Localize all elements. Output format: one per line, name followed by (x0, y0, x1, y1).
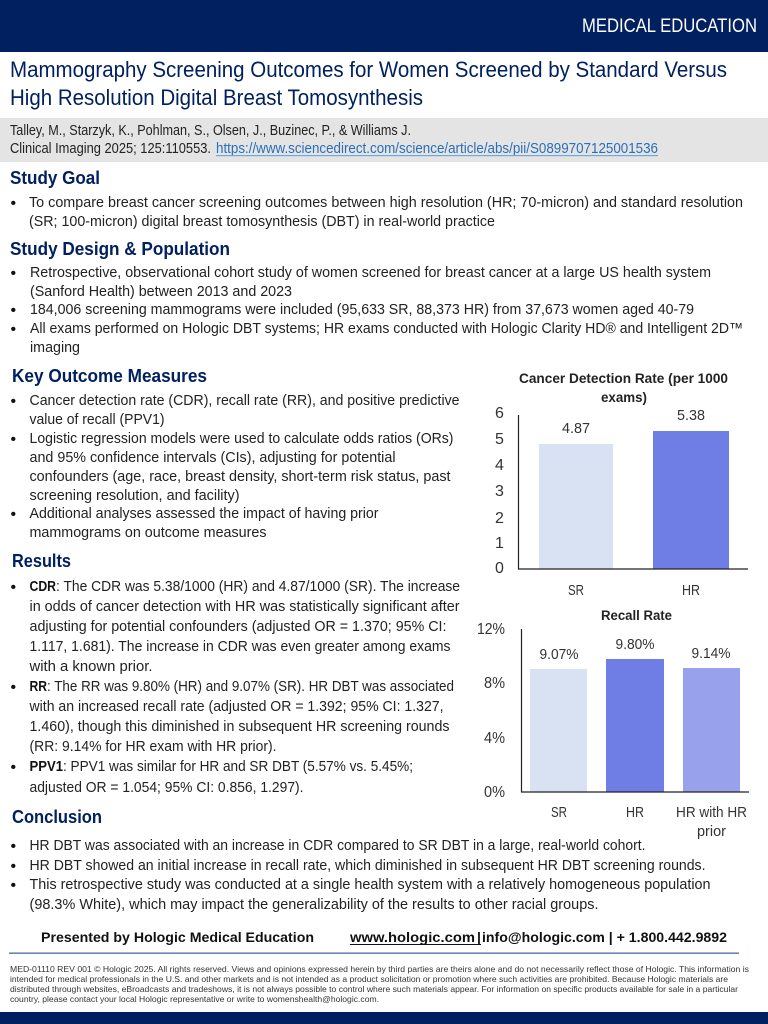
text block: study design bullets: All exams performed on Hologic DBT systems; HR exams conducted with Hologic Clarity HD® and Intelligent 2D™ (30, 321, 743, 337)
fine print disclaimer (10, 964, 749, 1004)
bar chart: cancer detection rate: SR (568, 583, 584, 599)
bar chart: cancer detection rate: 5.38 (677, 408, 705, 424)
text block: outcome bullets: confounders (age, race, breast density, short-term risk status, past (30, 469, 450, 485)
heading: conclusion: Conclusion (12, 807, 102, 827)
bar chart: recall rate: 9.07% (540, 647, 579, 663)
text block: conclusion bullets: • (10, 838, 16, 855)
text block: outcome bullets: Additional analyses assessed the impact of having prior (30, 506, 379, 522)
text block: study design bullets: • (10, 265, 16, 282)
fine print disclaimer: intended for medical professionals in the U.S. and other markets and is not intended as a product solicitation or promotion where such activities are prohibited. Because Hologic materials are (10, 974, 728, 984)
text block: outcome bullets: • (10, 431, 16, 448)
text block: outcome bullets: screening resolution, and facility) (30, 488, 240, 504)
text block: CDR result: 1.117, 1.681). The increase in CDR was even greater among exams (30, 639, 450, 655)
title: Mammography Screening Outcomes for Women Screened by Standard Versus (10, 57, 727, 82)
chart title: cancer detection rate (519, 371, 728, 405)
chart title: cancer detection rate: Cancer Detection Rate (per 1000 (519, 371, 728, 386)
presenter and contact line: www.hologic.com (349, 929, 475, 945)
text block: CDR result: in odds of cancer detection with HR was statistically significant after (30, 599, 460, 615)
bar chart: cancer detection rate: 2 (495, 510, 504, 527)
text block: conclusion bullets: (98.3% White), which may impact the generalizability of the results to other racial groups. (30, 897, 598, 913)
bar chart: recall rate: HR with HR (676, 805, 747, 821)
bar chart: recall rate (477, 608, 749, 840)
bar chart: recall rate: SR (551, 805, 567, 821)
bar chart: recall rate: prior (697, 824, 726, 840)
bar chart: cancer detection rate: 4 (495, 457, 504, 474)
heading: key outcome measures: Key Outcome Measures (12, 366, 207, 386)
text block: RR result: : The RR was 9.80% (HR) and 9.07% (SR). HR DBT was associated (47, 679, 454, 695)
text block: RR result: with an increased recall rate (adjusted OR = 1.392; 95% CI: 1.327, (29, 699, 444, 715)
text block: study design bullets: 184,006 screening mammograms were included (95,633 SR, 88,373 HR) from 37,673 women aged 40-79 (30, 302, 694, 318)
bar chart: cancer detection rate: 5 (495, 431, 504, 448)
bar chart: recall rate: 12% (477, 621, 505, 638)
panel: study goal (10, 168, 743, 230)
bar chart: recall rate: 4% (484, 730, 505, 747)
text block: study design bullets: • (10, 321, 16, 338)
citation band: Clinical Imaging 2025; 125:110553. (10, 141, 211, 157)
text block: study design bullets (10, 265, 743, 356)
text block: CDR result: adjusting for potential confounders (adjusted OR = 1.370; 95% CI: (30, 619, 446, 635)
text block: CDR result: CDR (30, 579, 56, 595)
text block: CDR result: • (10, 579, 16, 596)
text block: study design bullets: imaging (30, 340, 80, 356)
text block: RR result (10, 679, 454, 755)
text block: study design bullets: • (10, 302, 16, 319)
bar chart: recall rate: 9.80% (616, 637, 655, 653)
text block: RR result: 1.460), though this diminished in subsequent HR screening rounds (30, 719, 450, 735)
presenter and contact line (9, 929, 739, 954)
text block: outcome bullets: and 95% confidence intervals (CIs), adjusting for potential (30, 450, 396, 466)
text block: conclusion bullets: This retrospective study was conducted at a single health system with a relatively homogeneous population (30, 877, 710, 893)
title (10, 57, 727, 110)
heading: results: Results (12, 551, 71, 571)
bar chart: recall rate: HR (626, 805, 644, 821)
bar chart: cancer detection rate: 3 (495, 483, 504, 500)
presenter and contact line: info@hologic.com | + 1.800.442.9892 (482, 929, 727, 945)
header band (0, 0, 768, 52)
text block: CDR result: with a known prior. (28, 659, 152, 675)
bar chart: cancer detection rate: 0 (495, 560, 504, 577)
text block: outcome bullets: Cancer detection rate (CDR), recall rate (RR), and positive predictive (30, 393, 460, 409)
text block: PPV1 result: : PPV1 was similar for HR and SR DBT (5.57% vs. 5.45%; (63, 759, 413, 775)
text block: PPV1 result: • (10, 759, 16, 776)
bar chart: recall rate: 8% (484, 675, 505, 692)
text block: outcome bullets: • (10, 506, 16, 523)
citation band: Talley, M., Starzyk, K., Pohlman, S., Olsen, J., Buzinec, P., & Williams J. (10, 123, 411, 139)
bar chart: cancer detection rate (495, 371, 748, 599)
presenter and contact line: | (477, 929, 481, 945)
bar chart: recall rate: 9.14% (692, 646, 731, 662)
text block: study design bullets: (Sanford Health) between 2013 and 2023 (30, 284, 292, 300)
text block: study goal: To compare breast cancer screening outcomes between high resolution (HR; 70-micron) and standard resolution (29, 195, 743, 211)
text block: outcome bullets (10, 393, 460, 541)
text block: conclusion bullets: HR DBT was associated with an increase in CDR compared to SR DBT in a large, real-world cohort. (30, 838, 646, 854)
chart title: recall rate: Recall Rate (601, 608, 672, 623)
heading: study design: Study Design & Population (10, 239, 230, 259)
heading: study goal: Study Goal (10, 168, 100, 188)
panel: study design and population (10, 239, 743, 356)
text block: conclusion bullets: • (10, 858, 16, 875)
panel: results (10, 551, 460, 796)
text block: study goal (10, 195, 743, 230)
text block: conclusion bullets: • (10, 877, 16, 894)
text block: outcome bullets: value of recall (PPV1) (30, 412, 164, 428)
text block: CDR result (10, 579, 460, 675)
title: High Resolution Digital Breast Tomosynthesis (10, 85, 423, 110)
text block: study goal: • (10, 195, 16, 212)
text block: PPV1 result: PPV1 (30, 759, 63, 775)
panel: conclusion (10, 807, 710, 913)
text block: RR result: (RR: 9.14% for HR exam with HR prior). (30, 739, 276, 755)
text block: RR result: • (10, 679, 16, 696)
text block: study goal: (SR; 100-micron) digital breast tomosynthesis (DBT) in real-world practice (29, 214, 495, 230)
text block: outcome bullets: Logistic regression models were used to calculate odds ratios (ORs) (30, 431, 454, 447)
bar chart: cancer detection rate: 4.87 (562, 421, 590, 437)
footer band (0, 1012, 768, 1024)
text block: RR result: RR (30, 679, 47, 695)
bar chart: recall rate: 0% (484, 784, 505, 801)
bar chart: cancer detection rate: 6 (495, 405, 504, 422)
fine print disclaimer: distributed through websites, eBroadcasts and tradeshows, it is not always possible to control where such materials appear. For information on specific products available for sale in a particular (10, 984, 738, 994)
text block: outcome bullets: mammograms on outcome measures (30, 525, 266, 541)
panel: key outcome measures (10, 366, 460, 541)
presenter and contact line: Presented by Hologic Medical Education (41, 929, 314, 945)
text block: PPV1 result (10, 759, 413, 796)
citation band (0, 118, 768, 162)
chart title: cancer detection rate: exams) (601, 390, 647, 405)
fine print disclaimer: country, please contact your local Hologic representative or write to womenshealth@hologic.com. (10, 994, 379, 1004)
text block: PPV1 result: adjusted OR = 1.054; 95% CI: 0.856, 1.297). (30, 780, 304, 796)
text block: conclusion bullets (10, 838, 710, 913)
fine print disclaimer: MED-01110 REV 001 © Hologic 2025. All rights reserved. Views and opinions expressed herein by third parties are theirs alone and do not necessarily reflect those of Hologic. This information is (10, 964, 749, 974)
text block: study design bullets: Retrospective, observational cohort study of women screened for breast cancer at a large US health system (30, 265, 711, 281)
text block: CDR result: : The CDR was 5.38/1000 (HR) and 4.87/1000 (SR). The increase (56, 579, 460, 595)
citation band: https://www.sciencedirect.com/science/article/abs/pii/S0899707125001536 (216, 141, 658, 157)
text block: outcome bullets: • (10, 393, 16, 410)
bar chart: cancer detection rate: 1 (495, 535, 504, 552)
text block: conclusion bullets: HR DBT showed an initial increase in recall rate, which diminished in subsequent HR DBT screening rounds. (30, 858, 706, 874)
bar chart: cancer detection rate: HR (682, 583, 700, 599)
